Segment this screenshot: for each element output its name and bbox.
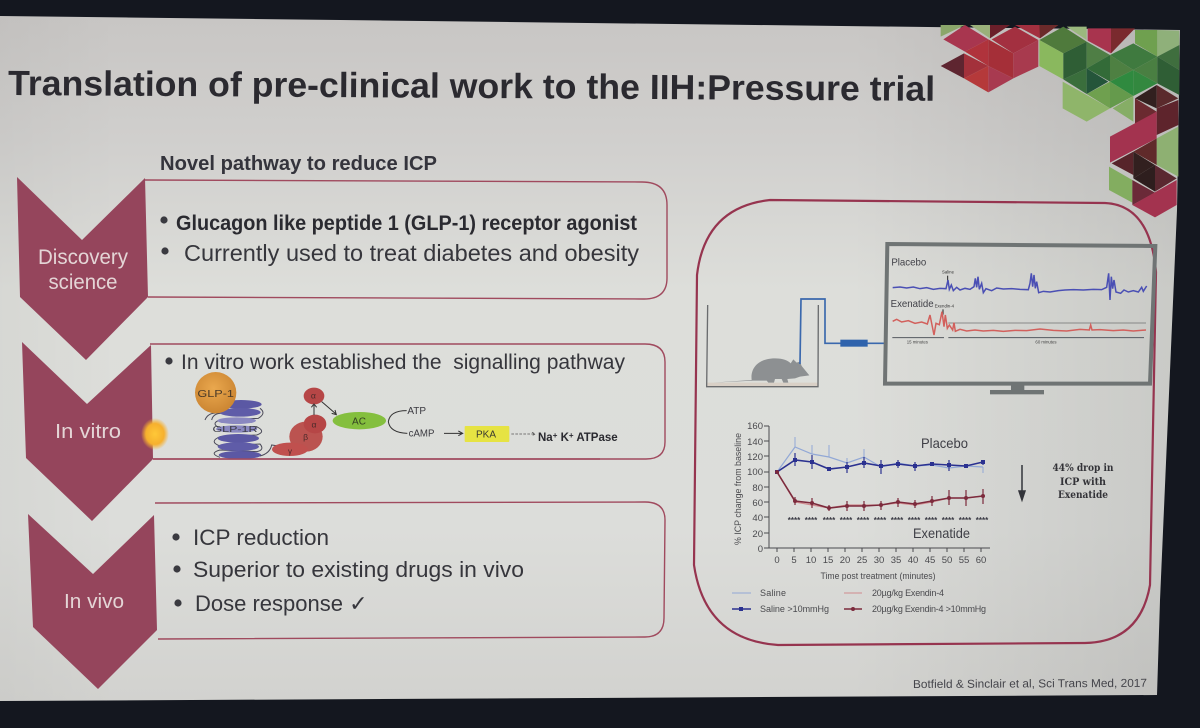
placebo label: Placebo (891, 257, 926, 268)
citation: Botfield & Sinclair et al, Sci Trans Med, 2017 (913, 678, 1147, 691)
chevron: in vivo (28, 514, 157, 689)
panel: discovery science box (145, 180, 667, 299)
exenatide trace (893, 312, 1146, 335)
y tick labels: 40 (752, 513, 763, 524)
exenatide series label: Exenatide (913, 525, 970, 541)
arrow: ICP drop (1019, 465, 1025, 500)
y tick labels: 120 (747, 452, 763, 463)
x tick labels: 0 (774, 555, 780, 566)
significance markers: **** (891, 516, 904, 525)
x tick labels: 60 (976, 555, 986, 566)
AC enzyme: AC (352, 416, 366, 427)
chart legend (732, 588, 986, 614)
placebo series label: Placebo (921, 435, 968, 451)
y tick labels: 0 (758, 544, 763, 555)
y tick labels: 160 (747, 421, 763, 432)
rat cage (707, 305, 818, 387)
reference line (948, 322, 1146, 324)
time scale bars: 60 minutes (1035, 340, 1057, 345)
ATP label: ATP (407, 406, 426, 417)
series: saline (777, 437, 983, 473)
y axis label: % ICP change from baseline (733, 433, 744, 545)
x tick labels: 55 (959, 555, 969, 566)
x tick labels: 40 (908, 555, 918, 566)
y tick labels: 80 (752, 483, 763, 494)
exenatide label: Exenatide (891, 299, 934, 310)
y tick labels (747, 421, 763, 555)
bullet: superior: Superior to existing drugs in vivo (193, 557, 524, 582)
cAMP to PKA arrow (444, 431, 463, 436)
ATP to cAMP arrow (388, 411, 407, 433)
x tick labels (774, 555, 986, 566)
chevron: in vitro (22, 342, 153, 521)
saline marker (942, 270, 955, 282)
x tick labels: 20 (840, 555, 850, 566)
dashed arrow to ATPase (511, 432, 535, 436)
ATPase label: + (553, 431, 558, 440)
decorative hexagon pattern (941, 25, 1179, 217)
exendin marker (935, 303, 955, 315)
saline marker: Saline (942, 270, 955, 275)
laser pointer flare (141, 418, 169, 450)
callout: 44% drop: Exenatide (1058, 490, 1108, 501)
significance markers: **** (874, 516, 887, 525)
x tick labels: 45 (925, 555, 935, 566)
bullet: GLP-1 agonist: Glucagon like peptide 1 (GLP-1) receptor agonist (176, 212, 637, 235)
placebo trace (893, 273, 1147, 300)
experimental setup (707, 244, 1155, 394)
chevron: discovery science: science (48, 271, 118, 294)
GLP-1 receptor: GLP-1R (212, 424, 257, 434)
catheter tube (800, 299, 885, 364)
pressure transducer (840, 340, 868, 347)
significance markers: **** (976, 516, 989, 525)
pathway baseline overlap (153, 458, 600, 460)
chevron: in vivo: In vivo (64, 591, 124, 613)
significance markers: **** (959, 516, 972, 525)
callout: 44% drop: 44% drop in (1052, 463, 1114, 474)
chevron: discovery science: Discovery (38, 246, 128, 269)
significance markers: **** (805, 516, 818, 525)
title: Translation of pre-clinical work to the IIH:Pressure trial (8, 64, 935, 109)
chevron: in vitro: In vitro (55, 421, 121, 443)
G protein subunits: α (311, 391, 316, 401)
callout: 44% drop (1052, 463, 1114, 501)
bullet: dose response: Dose response ✓ (195, 591, 368, 617)
GLP-1 receptor (205, 400, 263, 459)
significance markers: **** (942, 516, 955, 525)
G protein subunits: α (311, 419, 317, 429)
bullet: ICP reduction: ICP reduction (193, 525, 329, 550)
heading: novel pathway: Novel pathway to reduce ICP (160, 153, 437, 175)
y tick labels: 20 (752, 529, 763, 540)
x tick labels: 5 (791, 555, 797, 566)
x tick labels: 10 (806, 555, 816, 566)
significance markers: **** (908, 516, 921, 525)
cAMP label: cAMP (409, 428, 434, 439)
series: exendin-4 above 10 mmHg (775, 470, 985, 511)
G protein subunits (260, 388, 336, 456)
x tick labels: 15 (823, 555, 833, 566)
PKA box: PKA (476, 430, 496, 441)
significance markers (788, 516, 989, 525)
chart legend: Saline (760, 588, 786, 598)
GLP-1 ligand (195, 372, 236, 413)
x tick labels: 25 (857, 555, 867, 566)
chart legend: 20µg/kg Exendin-4 >10mmHg (872, 604, 986, 614)
bullet: current use: Currently used to treat diabetes and obesity (184, 240, 640, 266)
rat silhouette (713, 358, 809, 383)
x tick labels: 30 (874, 555, 884, 566)
PKA box (465, 426, 509, 442)
ATPase label: Na (538, 432, 553, 444)
series: saline above 10 mmHg (775, 453, 985, 474)
x tick labels: 50 (942, 555, 952, 566)
significance markers: **** (823, 516, 836, 525)
axes (764, 426, 990, 552)
x axis label: Time post treatment (minutes) (820, 571, 936, 581)
significance markers: **** (788, 516, 801, 525)
callout: 44% drop: ICP with (1060, 477, 1107, 488)
panel: in vivo box (155, 502, 665, 639)
chart legend: 20µg/kg Exendin-4 (872, 588, 944, 598)
line chart: ICP change (733, 421, 990, 581)
panel: in vitro box (150, 344, 665, 459)
G protein subunits: β (303, 432, 308, 442)
AC enzyme (333, 412, 386, 429)
monitor (885, 244, 1155, 394)
ATPase label: ATPase (574, 432, 618, 444)
significance markers: **** (857, 516, 870, 525)
significance markers: **** (925, 516, 938, 525)
chart legend: Saline >10mmHg (760, 604, 829, 614)
y tick labels: 140 (747, 437, 763, 448)
ATPase label: + (569, 431, 574, 440)
bullet: signalling pathway: In vitro work established the signalling pathway (181, 351, 625, 374)
time scale bars (892, 338, 1144, 345)
G protein subunits: γ (288, 447, 292, 456)
signalling pathway diagram (195, 372, 535, 459)
y tick labels: 60 (752, 498, 763, 509)
series: exendin-4 (777, 472, 983, 508)
x tick labels: 35 (891, 555, 901, 566)
panel: pre-clinical evidence (694, 200, 1156, 645)
chevron: discovery science (17, 177, 148, 360)
ATPase label: K (557, 432, 570, 444)
significance markers: **** (840, 516, 853, 525)
time scale bars: 15 minutes (907, 339, 928, 344)
y tick labels: 100 (747, 467, 763, 478)
exendin marker: Exendin-4 (935, 303, 955, 308)
GLP-1 ligand: GLP-1 (197, 389, 235, 400)
